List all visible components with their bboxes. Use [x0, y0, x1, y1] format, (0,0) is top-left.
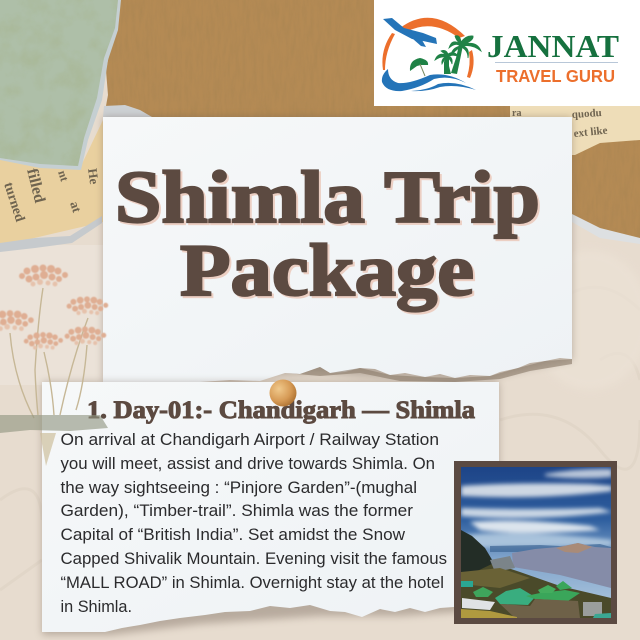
- newspaper scrap: left: filled: [23, 167, 48, 205]
- text block: day 1 description: you will meet, assist and drive towards Shimla. On: [60, 454, 435, 473]
- brand tagline: Travel Guru: TRAVEL GURU: [496, 66, 615, 86]
- newspaper scrap: left: at: [67, 199, 85, 215]
- icon: travel logo: [382, 18, 481, 91]
- flower stem over paper: [40, 433, 56, 466]
- panel: title paper: [103, 117, 572, 382]
- title: Shimla Trip Package: Shimla Trip: [115, 157, 540, 239]
- text block: day 1 description: Garden), “Timber-trail”. Shimla was the former: [60, 501, 413, 520]
- text block: day 1 description: Capped Shivalik Mountain. Evening visit the famous: [60, 549, 447, 568]
- newspaper scrap: left: nt: [55, 169, 72, 183]
- text block: day 1 description: [60, 430, 447, 616]
- title: Shimla Trip Package: Package: [180, 230, 474, 312]
- brown kraft paper: [104, 0, 640, 244]
- newspaper scrap: right: [510, 106, 640, 155]
- brand name: Jannat: JANNAT: [487, 28, 619, 64]
- tape strip: [0, 415, 108, 433]
- title: Shimla Trip Package: [115, 157, 542, 314]
- newspaper scrap: left: turned: [0, 181, 27, 224]
- pressed flowers: [0, 264, 108, 418]
- green watercolor paper: [0, 0, 121, 170]
- newspaper scrap: right: quodu: [571, 107, 602, 121]
- text block: day 1 description: in Shimla.: [60, 597, 132, 616]
- title: Shimla Trip Package: Shimla Trip: [117, 159, 542, 241]
- newspaper scrap: right: ext like: [573, 124, 608, 140]
- title: Shimla Trip Package: Package: [182, 232, 476, 314]
- newspaper scrap: left: [0, 120, 103, 252]
- text block: day 1 description: the way sightseeing : “Pinjore Garden”-(mughal: [60, 478, 417, 497]
- newspaper scrap: left: He: [85, 167, 102, 185]
- torn rim above title paper: [103, 105, 152, 117]
- text block: day 1 description: Capital of “British India”. Set amidst the Snow: [60, 525, 406, 544]
- panel: day 1 paper: [42, 382, 499, 635]
- logo: Jannat Travel Guru: [374, 0, 640, 106]
- icon: gold pin: [270, 380, 296, 406]
- photo: Shimla mountain village: [454, 461, 617, 624]
- text block: day 1 description: On arrival at Chandigarh Airport / Railway Station: [60, 430, 439, 449]
- newspaper scrap: right: ra: [512, 108, 521, 119]
- heading: day 1: 1. Day-01:- Chandigarh — Shimla: [87, 397, 476, 424]
- text block: day 1 description: “MALL ROAD” in Shimla. Overnight stay at the hotel: [60, 573, 444, 592]
